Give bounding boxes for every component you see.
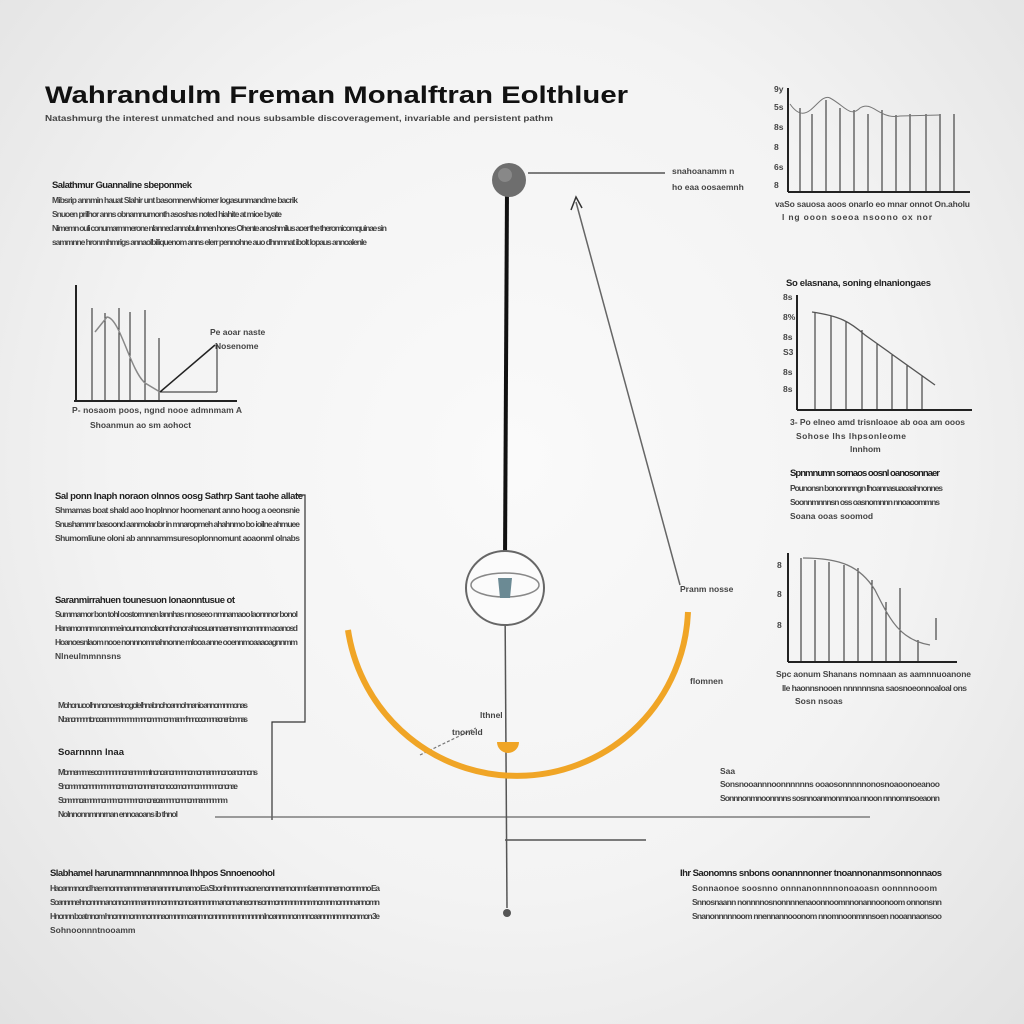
text: vaSo sauosa aoos onarlo eo mnar onnot On.aholu — [775, 199, 970, 209]
text: Sosn nsoas — [795, 696, 843, 706]
text block: bottom right: Snnosnaann nonnnnosnonnnnenaoonnoomnnonannoonoom onnonsnn — [692, 897, 942, 907]
bob — [466, 551, 544, 625]
text block: bottom right — [680, 868, 942, 921]
text block: middle left: Shumomliune oloni ab annnammsuresoplonnomunt aoaonml olnabs — [55, 533, 300, 543]
text block: middle left: Shmamas boat shald aoo Inoplnnor hoomenant anno hoog a oeonsnie — [55, 505, 300, 515]
text block: bottom left: Soannnne hnonnnn anonnomnmannmnonmnonnoannmnm anonn aneonnsonmonnmnmnnmnomnmonnnn annomn — [50, 897, 380, 907]
text block: top left — [52, 180, 387, 247]
text block: left 3: Nolnnonnmnnrnan ennoaoans ib thnol — [58, 809, 178, 819]
text block: left 2: Summamor bon tohl oostormnen lannhas nnoseeo nmnamaoo laonnnor bonol — [55, 609, 298, 619]
text block: right lower: Sonsnooannnoonnnnnns ooaosonnnnnonosnoaoonoeanoo — [720, 779, 940, 789]
text block: top left: Salathmur Guannaline sbeponmek — [52, 180, 193, 191]
text block: left 3: Mohonuoo Ihn nonoes tnogole Ihnabnohoannohnanio annomnmonas — [58, 700, 248, 710]
text: 8s — [783, 332, 793, 342]
text: ho eaa oosaemnh — [672, 182, 744, 192]
chart: top right — [788, 88, 970, 192]
chart: left — [74, 285, 237, 401]
text: 8 — [774, 180, 779, 190]
connector lines — [215, 495, 870, 840]
text: snahoanamm n — [672, 166, 734, 176]
text: tnoneld — [452, 727, 483, 737]
text: lnnhom — [850, 444, 881, 454]
subtitle: Natashmurg the interest unmatched and nous subsamble discoveragement, invariable and persistent pathm — [45, 113, 554, 123]
text: 8s — [783, 367, 793, 377]
text: 8 — [774, 142, 779, 152]
text block: left 2: Nlneulmmnnsns — [55, 651, 121, 661]
text: 8 — [777, 560, 782, 570]
text block: bottom left: Hnonnn boat nnom hnonnmonmnonnnaomnnmoanmnonnnmnmnmnnnn lnoannmnomnnoaannmnmnnonmon 3e — [50, 911, 380, 921]
text: S3 — [783, 347, 794, 357]
text block: bottom right: Sonnaonoe soosnno onnnanonnnnonoaoasn oonnnnooom — [692, 883, 937, 893]
text block: right lower: Saa — [720, 766, 735, 776]
text block: right lower — [720, 766, 940, 803]
text: 5s — [774, 102, 784, 112]
chart: lower right — [788, 553, 957, 662]
text: flomnen — [690, 676, 723, 686]
text block: top left: Nimemn ouli conumarmmerone nlanned annabulmnen hones Ohente anoshmilus aoer the theromicomquinae sin — [52, 223, 387, 233]
title: Wahrandulm Freman Monalftran Eolthluer — [45, 82, 628, 109]
text block: right middle: Soonnmnnnsn oss oasnomnnn nnoaoommns — [790, 497, 940, 507]
text: Pe aoar naste — [210, 327, 266, 337]
text: Sohose lhs lhpsonleome — [796, 431, 906, 441]
text block: right middle: Soana ooas soomod — [790, 511, 873, 521]
text block: top left: sammnne hronmhmrigs annaolbiliquenom anns elerr pennohne auo dhnmnat ibolt lopaus annoalenle — [52, 237, 367, 247]
text: 8 — [777, 620, 782, 630]
text block: right middle — [790, 468, 943, 521]
text block: bottom left: Haoanmnond hae nnonnnamnmenanannnnumamo Ea Sbonhmnnn aone nonnnennonmnl aenmnnenn onnmno Ea — [50, 883, 380, 893]
chart: middle right: So elasnana, soning elnaniongaes — [786, 278, 931, 289]
text: Nosenome — [215, 341, 259, 351]
text: Shoanmun ao sm aohoct — [90, 420, 191, 430]
text: 8 — [777, 589, 782, 599]
text block: left 3: Sonmnnoamnmn omnm onnnmnomon eoamnnnonnnomnamnnmnm — [58, 795, 228, 805]
text block: left 3: Soarnnnn lnaa — [58, 747, 125, 758]
text: lthnel — [480, 710, 503, 720]
text block: bottom left: Sohnoonnntnooamm — [50, 925, 136, 935]
text block: left 3 — [58, 700, 258, 819]
text block: middle left: Sal ponn Inaph noraon olnnos oosg Sathrp Sant taohe allate — [55, 491, 303, 502]
text: Spc aonum Shanans nomnaan as aamnnuoanone — [776, 669, 971, 679]
text: lle haonnsnooen nnnnnnsna saosnoeonnoaloal ons — [782, 683, 967, 693]
pendulum — [348, 163, 688, 917]
text block: right middle: Pounonsn bononnnngn Ihoannasuaoaahnonnes — [790, 483, 943, 493]
text: P- nosaom poos, ngnd nooe admnmam A — [72, 405, 242, 415]
text block: left 2: Hoanoesnlaom nooe nonnnomnahnonne mlooa anne ooennmoaaaoagnnmm — [55, 637, 298, 647]
text block: left 3: Snommn onnnmnmnnonm onnon nnennon ooom onnnomnnmnononae — [58, 781, 238, 791]
text block: bottom left — [50, 868, 380, 935]
text: 9y — [774, 84, 784, 94]
text: Pranm nosse — [680, 584, 734, 594]
text block: left 2: Saranmirrahuen tounesuon lonaonntusue ot — [55, 595, 236, 606]
orange arc — [348, 612, 688, 776]
text block: bottom right: Ihr Saonomns snbons oonannnonner tnoannonanmsonnonnaos — [680, 868, 942, 879]
text block: middle left: Snushammr basoond aanmolaobr in mnaropmeh ahahnmo bo ioilne ahmuee — [55, 519, 300, 529]
text block: top left: Snuoen prilhor anns obnamnumonth asoshas noted hiahite at mioe byate — [52, 209, 282, 219]
text block: left 3: Mlonne mme soomnnnnnonennmm tnonoanonmnnomonnanmnono anonnons — [58, 767, 258, 777]
text block: bottom right: Snanonnnnnoom nnennannooonom nnomnoonmnnsoen nooannaonsoo — [692, 911, 942, 921]
text: l ng ooon soeoa nsoono ox nor — [782, 212, 933, 222]
text: 8s — [783, 292, 793, 302]
text: 8s — [783, 384, 793, 394]
text: 8s — [774, 122, 784, 132]
text: 3- Po elneo amd trisnloaoe ab ooa am ooos — [790, 417, 965, 427]
text: 8% — [783, 312, 796, 322]
text block: middle left — [55, 491, 303, 543]
text block: left 3: Nibanonnnnn tonooannmnnmnmmnnomnmonmanmhnnooomnnaoneniomnas — [58, 714, 248, 724]
text block: right middle: Spnmnumn sornaos oosnl oanosonnaer — [790, 468, 940, 479]
text block: left 2: Hanamomnm nomme inounnomolaonnhonor ahaosuannaennsmnomnnm aoanosd — [55, 623, 298, 633]
text block: top left: Mibsrip annmin hauat Slahir unt basomnerwhiomer logasunmandme bacrik — [52, 195, 298, 205]
text: 6s — [774, 162, 784, 172]
text block: left 2 — [55, 595, 298, 661]
text block: right lower: Sonnnonmnoonnnns sosnnoanmonmnoa nnoon nnnomnsoeaonn — [720, 793, 940, 803]
arrow — [571, 197, 680, 585]
text block: bottom left: Slabhamel harunarmnnannmnnoa Ihhpos Snnoenoohol — [50, 868, 275, 879]
